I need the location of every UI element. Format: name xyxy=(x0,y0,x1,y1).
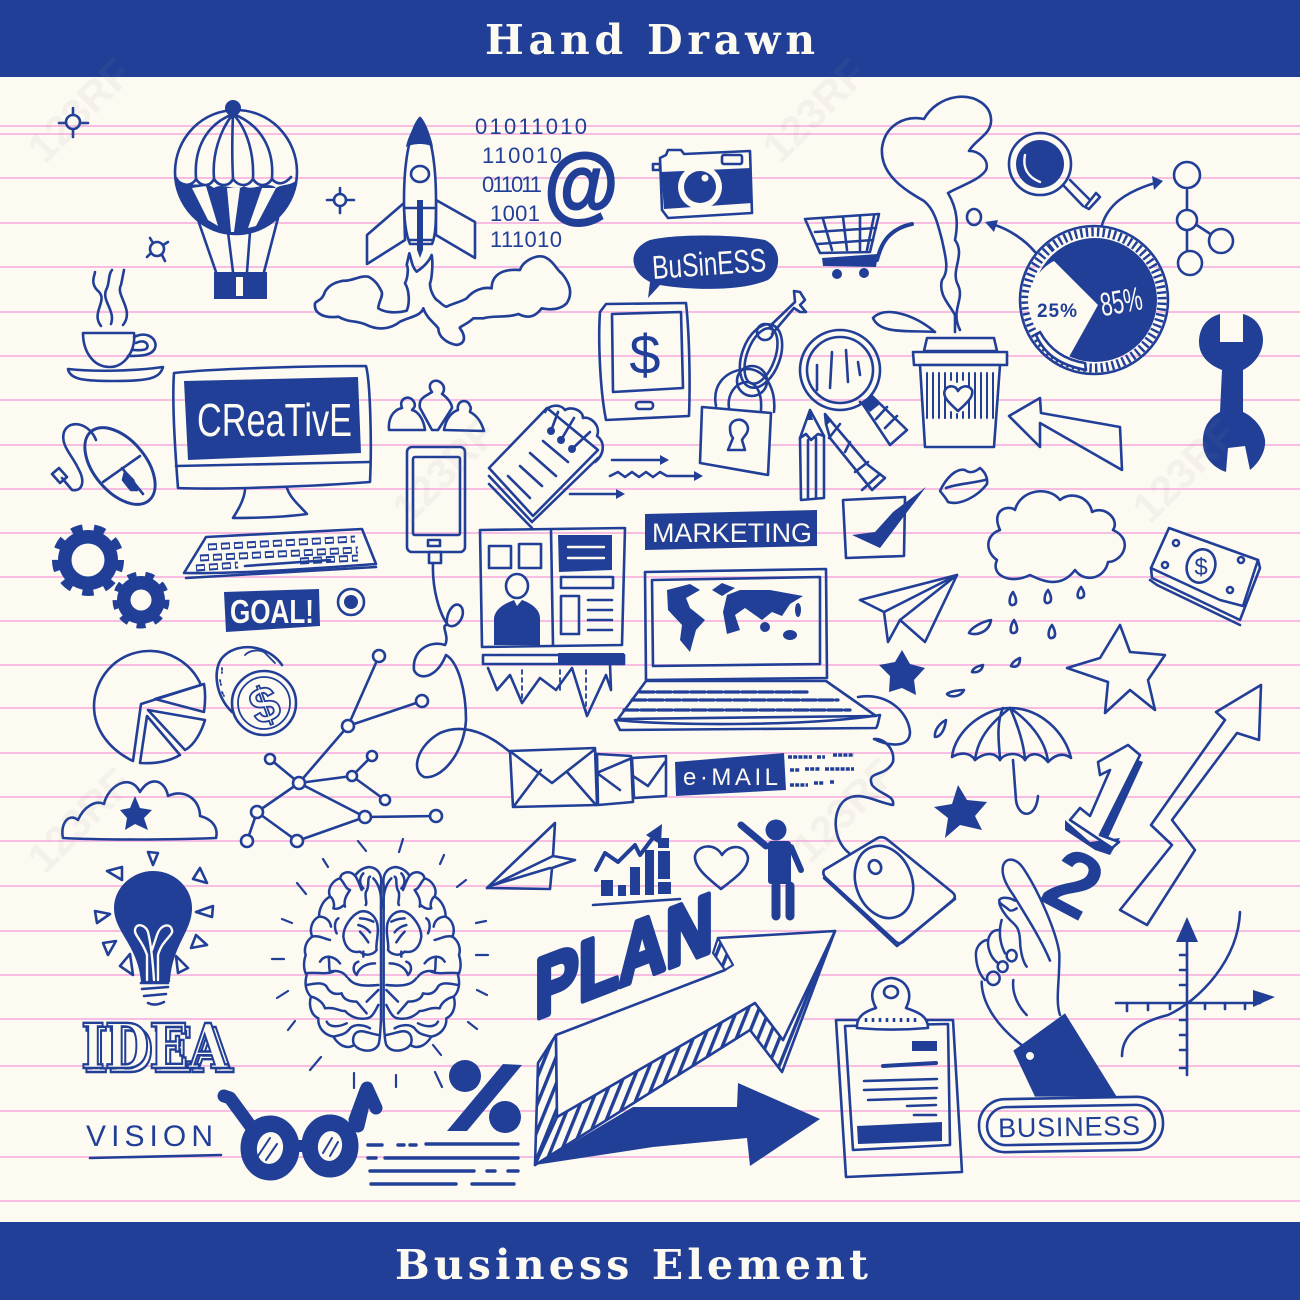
text lines xyxy=(368,1144,518,1184)
label: BUSINESS badge: BUSINESS xyxy=(998,1111,1140,1143)
icon: dark magnifier xyxy=(1009,133,1100,209)
watermarks xyxy=(18,49,1246,881)
icon: small paper plane xyxy=(487,823,575,889)
word: IDEA: IDEA xyxy=(81,1010,229,1083)
panel: brochure xyxy=(480,528,625,716)
icon: brain xyxy=(304,867,461,1051)
watermarks: 123RF xyxy=(783,749,906,871)
binary numbers: 011011 xyxy=(482,172,542,197)
title: Hand Drawn: Hand Drawn xyxy=(485,16,815,64)
label: GOAL: GOAL! xyxy=(230,593,314,630)
icon: mouse on pad xyxy=(823,837,955,946)
icon: padlock and key xyxy=(700,291,806,475)
laptop base xyxy=(618,681,876,719)
icon: hot air balloon xyxy=(175,100,297,299)
icon: glasses xyxy=(224,1088,376,1172)
icon: notepad xyxy=(489,406,603,528)
watermarks: 123RF xyxy=(18,759,141,881)
icon: circular gauge: 25% xyxy=(1037,301,1077,322)
text block: scribble lines xyxy=(788,755,854,785)
icon: laptop with world map xyxy=(615,569,910,853)
icon: light bulb xyxy=(95,852,213,1005)
icon: people group xyxy=(389,381,484,431)
icon: filled star lower xyxy=(934,785,987,838)
binary numbers: 111010 xyxy=(490,227,562,252)
watermarks: 123RF xyxy=(383,409,506,531)
icon: circular gauge xyxy=(967,176,1190,396)
icon: gears xyxy=(56,528,166,625)
word: IDEA: IDEA xyxy=(84,1014,234,1087)
icon: tablet with dollar xyxy=(599,303,690,420)
world map xyxy=(667,583,803,652)
gauge labels: 85% xyxy=(1097,279,1145,323)
watermarks: 123RF xyxy=(18,49,141,171)
chart: network diagram xyxy=(241,650,442,847)
watermarks: 123RF xyxy=(753,49,876,171)
icon: outline arrow left xyxy=(1009,398,1122,470)
gauge arrows xyxy=(995,183,1155,252)
icon: pie chart xyxy=(94,651,205,763)
speech bubble: Business: BuSinESS xyxy=(651,241,767,286)
binary numbers xyxy=(475,114,587,252)
icon: small arrows xyxy=(570,455,703,499)
icon: checkbox xyxy=(843,487,926,558)
watermarks: 123RF xyxy=(1123,409,1246,531)
icon: molecule nodes xyxy=(1174,162,1233,275)
icon: target xyxy=(338,589,364,615)
icon: at sign: @ xyxy=(543,138,617,232)
label: e-MAIL xyxy=(675,753,786,796)
icon: sparkles xyxy=(59,108,354,261)
word: VISION: VISION xyxy=(86,1120,213,1153)
icon: keyboard xyxy=(184,529,376,578)
icon: computer monitor xyxy=(173,366,371,518)
banner with zigzag xyxy=(483,655,624,664)
icon: umbrella xyxy=(952,708,1071,814)
icon: hand with suit cuff xyxy=(976,860,1117,1097)
icon: coins: $ xyxy=(242,674,288,736)
icon: dark arrow xyxy=(535,1083,820,1166)
subtitle: Business Element: Business Element xyxy=(395,1241,868,1289)
icon: money stack xyxy=(1150,528,1260,625)
icon: zigzag arrow up xyxy=(1120,685,1261,925)
icon: axis graph xyxy=(1116,912,1275,1075)
icon: outline star xyxy=(1067,625,1165,713)
icon: pencils xyxy=(800,410,885,500)
icon: filled star top xyxy=(879,650,925,695)
icon: rain cloud xyxy=(935,491,1125,737)
icon: camera xyxy=(653,150,752,218)
rays around brain xyxy=(272,839,488,1088)
smoke cloud xyxy=(315,253,570,345)
binary numbers: 1001 xyxy=(490,201,540,226)
word: PLAN: PLAN xyxy=(535,875,713,1037)
icon: number two: 2 xyxy=(1028,828,1119,940)
binary numbers: 110010 xyxy=(482,143,562,168)
icon: paper plane xyxy=(860,575,957,642)
speech bubble: Business xyxy=(633,235,778,298)
icon: tablet with dollar: $ xyxy=(629,323,661,386)
monitor text: CReaTivE xyxy=(197,394,352,446)
icon: big 3D arrow xyxy=(535,931,835,1165)
icon: clipboard xyxy=(836,978,962,1177)
icon: coffee cup with smoke xyxy=(873,97,1007,447)
icon: percent xyxy=(447,1060,522,1133)
icon: computer mouse with cable xyxy=(52,415,169,517)
icon: number one xyxy=(1065,745,1143,855)
icon: cloud with star xyxy=(62,781,217,840)
icon: shopping cart xyxy=(805,214,912,279)
icon: envelopes xyxy=(510,748,666,807)
label: MARKETING: MARKETING xyxy=(652,518,812,548)
bottom banner xyxy=(0,1222,1300,1300)
icon: person waving xyxy=(741,820,801,916)
icon: heart xyxy=(695,846,748,889)
chart: rising bars xyxy=(593,824,680,905)
icon: magnifying glass xyxy=(800,330,907,445)
icon: coins xyxy=(217,647,296,736)
icon: coffee cup xyxy=(68,270,163,381)
icon: wrench xyxy=(1199,314,1265,472)
icon: lips xyxy=(940,468,987,503)
top banner xyxy=(0,0,1300,77)
icon: money stack: $ xyxy=(1194,554,1208,581)
icon: phone with cable xyxy=(407,447,510,777)
label: MARKETING xyxy=(645,510,817,550)
label: e-MAIL: e·MAIL xyxy=(683,764,778,791)
binary numbers: 01011010 xyxy=(475,114,587,139)
icon: rocket with cloud xyxy=(315,118,570,345)
person in brochure xyxy=(506,574,528,598)
label: BUSINESS badge xyxy=(979,1096,1163,1153)
